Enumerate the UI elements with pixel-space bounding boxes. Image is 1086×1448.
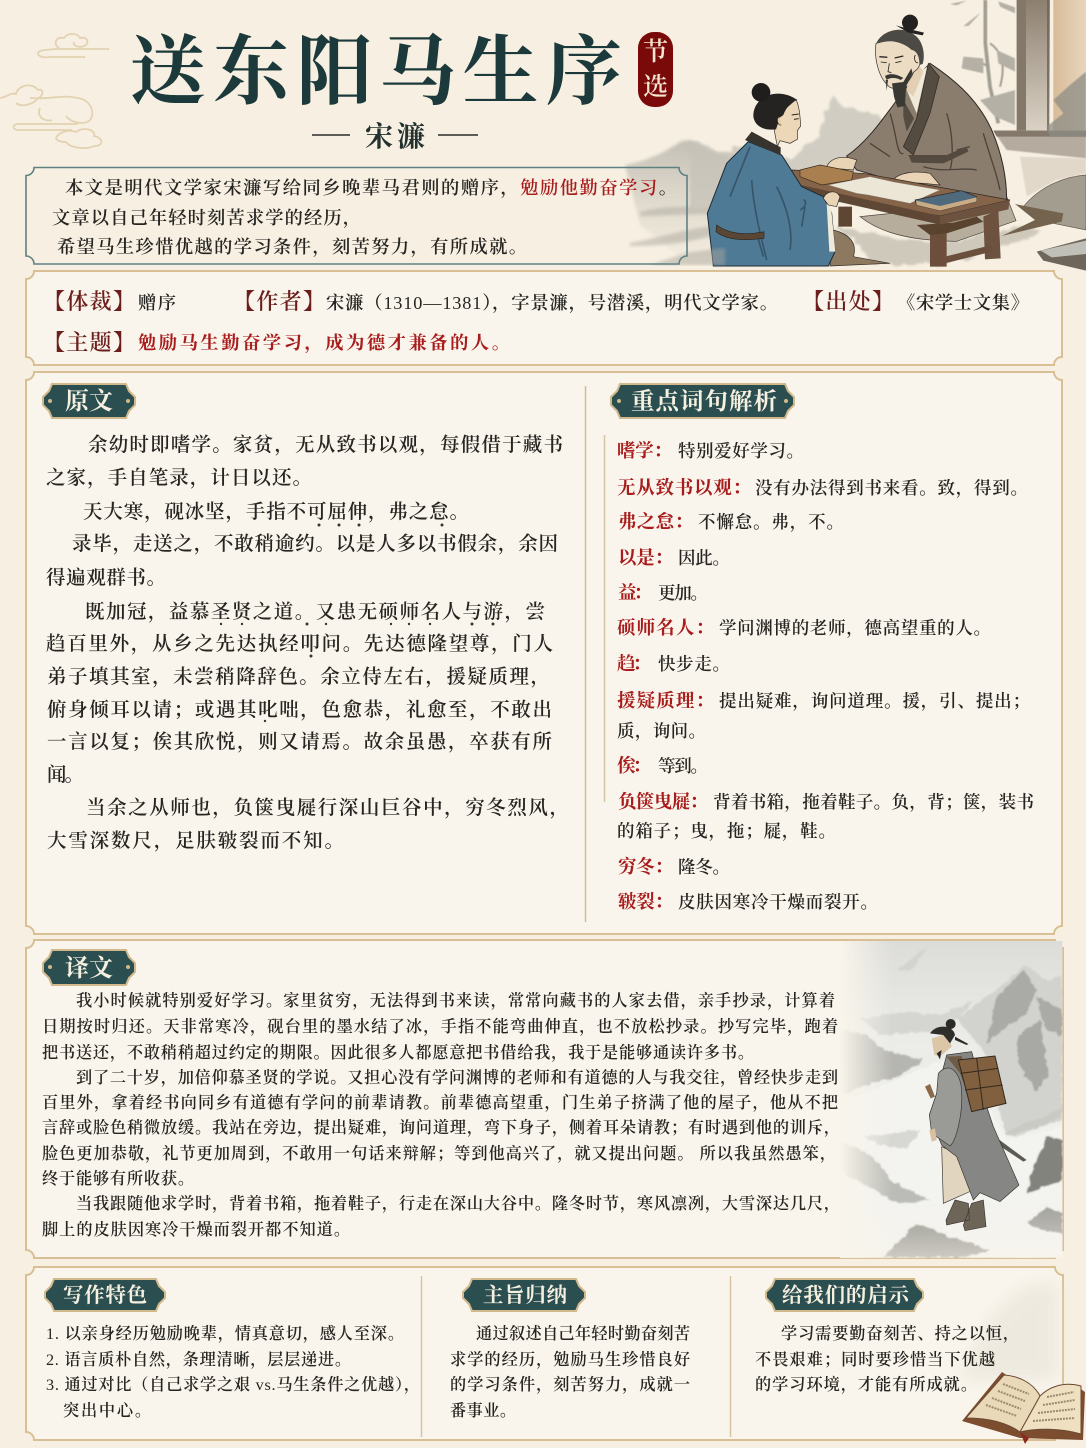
panel: basic info: [26, 271, 1062, 365]
text block: translation: 我小时候就特别爱好学习。家里贫穷，无法得到书来读，常常向藏书的人家去借，亲手抄录，计算着: [76, 991, 835, 1010]
list: vocabulary: 以是：: [618, 548, 673, 569]
column: main idea: 通过叙述自己年轻时勤奋刻苦: [476, 1324, 690, 1343]
text block: original: 一言以复；俟其欣悦，则又请焉。故余虽愚，卒获有所: [47, 731, 552, 753]
text block: original: 得遍观群书。: [46, 567, 166, 589]
background distance: [690, 97, 1043, 265]
list: vocabulary: 益：: [618, 583, 652, 604]
column: main idea: 番事业。: [450, 1401, 516, 1420]
list: vocabulary: 援疑质理：: [617, 690, 714, 712]
text block: original: 既加冠，益慕圣贤之道。又患无硕师名人与游，尝: [85, 601, 545, 623]
column: writing features: 1. 以亲身经历勉励晚辈，情真意切，感人至深。: [46, 1324, 404, 1343]
ink mountains: [625, 140, 800, 265]
figure: [993, 1137, 1027, 1162]
panel: basic info: 【体裁】: [43, 289, 135, 314]
column: takeaways: 给我们的启示: [782, 1278, 910, 1308]
icon: open book: [962, 1372, 1085, 1444]
list: vocabulary: 等到。: [658, 756, 708, 776]
seal: excerpt mark: 选: [643, 67, 668, 103]
list: vocabulary: 皮肤因寒冷干燥而裂开。: [678, 892, 878, 912]
panel: basic info: 【出处】: [802, 289, 894, 314]
text block: translation: 终于能够有所收获。: [42, 1169, 194, 1188]
panel: summary row: [26, 1267, 1063, 1440]
teacher lower robe: [860, 197, 1016, 241]
column: writing features: 2. 语言质朴自然，条理清晰，层层递进。: [46, 1350, 351, 1369]
column: writing features: 突出中心。: [63, 1402, 151, 1420]
column: takeaways: 的学习环境，才能有所成就。: [755, 1375, 977, 1394]
text block: original: 俯身倾耳以请；或遇其叱咄，色愈恭，礼愈至，不敢出: [47, 699, 552, 721]
text block: translation: 言辞或脸色稍微放缓。我站在旁边，提出疑难，询问道理，弯下身子，侧着耳朵请教；有时遇到他的训斥，: [42, 1118, 840, 1137]
column: main idea: 的学习条件，刻苦努力，成就一: [450, 1375, 690, 1394]
list: vocabulary: 没有办法得到书来看。致，得到。: [755, 478, 1028, 499]
panel: basic info: 宋濂（1310—1381），字景濂，号潜溪，明代文学家。: [326, 293, 778, 314]
column: writing features: 写作特色: [63, 1278, 147, 1308]
list: vocabulary: 嗜学：: [617, 441, 672, 462]
column: writing features: [45, 1278, 420, 1420]
teacher robe: [847, 63, 1007, 200]
text block: translation: 百里外，拿着经书向同乡有道德有学问的前辈请教。前辈德高望重，门生弟子挤满了他的屋子，他从不把: [42, 1093, 838, 1112]
list: vocabulary: 负箧曳屣：: [618, 791, 708, 813]
list: vocabulary: 质，询问。: [617, 721, 706, 742]
list: vocabulary: 学问渊博的老师，德高望重的人。: [719, 618, 991, 639]
illustration: traveller in the snow: [840, 941, 1062, 1258]
list: vocabulary: 提出疑难，询问道理。援，引、提出；: [719, 691, 1030, 712]
list: vocabulary: 无从致书以观：: [617, 478, 751, 499]
list: vocabulary: 硕师名人：: [617, 618, 714, 639]
list: vocabulary: 弗之怠：: [618, 512, 693, 533]
teacher hands: [826, 157, 857, 170]
text block: original: 天大寒，砚冰坚，手指不可屈伸，弗之怠。: [83, 500, 469, 523]
panel: basic info: 【主题】: [43, 330, 135, 355]
student head: [773, 99, 801, 147]
list: vocabulary: 趋：: [617, 654, 651, 675]
list: vocabulary: 因此。: [678, 548, 730, 568]
text block: original: 趋百里外，从乡之先达执经叩问。先达德隆望尊，门人: [46, 632, 553, 655]
table: [838, 207, 852, 227]
heading: vocabulary: 重点词句解析: [631, 382, 777, 416]
column: takeaways: 不畏艰难；同时要珍惜当下优越: [755, 1350, 995, 1369]
panel: intro: 希望马生珍惜优越的学习条件，刻苦努力，有所成就。: [57, 237, 527, 258]
panel: basic info: 《宋学士文集》: [897, 293, 1029, 313]
panel: intro: 本文是明代文学家宋濂写给同乡晚辈马君则的赠序，勉励他勤奋学习。: [65, 177, 677, 199]
title: 送东阳马生序: [130, 11, 622, 120]
heading: original text: [43, 381, 135, 418]
panel: basic info: 【作者】: [233, 289, 325, 314]
text block: original: 之家，手自笔录，计日以还。: [46, 467, 312, 489]
text block: original: 弟子填其室，未尝稍降辞色。余立侍左右，援疑质理，: [47, 665, 550, 688]
text block: translation: 日期按时归还。天非常寒冷，砚台里的墨水结了冰，手指不能弯曲伸直，也不放松抄录。抄写完毕，跑着: [42, 1017, 838, 1036]
panel: translation: [26, 940, 1063, 1258]
column: main idea: [450, 1278, 690, 1420]
column: takeaways: [755, 1278, 1019, 1394]
panel: intro: [26, 168, 687, 264]
list: vocabulary: 更加。: [658, 583, 708, 603]
list: vocabulary: 的箱子；曳，拖；屣，鞋。: [617, 821, 836, 842]
text block: original: 余幼时即嗜学。家贫，无从致书以观，每假借于藏书: [88, 434, 563, 456]
list: vocabulary: 穷冬：: [618, 856, 673, 878]
author line: 宋濂: [365, 115, 425, 155]
rock, mat, stool: [1023, 175, 1086, 230]
text block: translation: 把书送还，不敢稍稍超过约定的期限。因此很多人都愿意把书借给我，我于是能够通读许多书。: [42, 1043, 754, 1062]
column: main idea: 求学的经历，勉励马生珍惜良好: [450, 1351, 690, 1369]
student lower garment: [830, 230, 890, 266]
header illustration: teacher and student: [625, 0, 1086, 271]
text block: original: 闻。: [47, 764, 84, 786]
cloud ornaments: [0, 34, 109, 148]
panel: original text and vocabulary: [26, 372, 1062, 934]
seal: excerpt mark: [638, 32, 673, 107]
text block: translation: 当我跟随他求学时，背着书箱，拖着鞋子，行走在深山大谷中。隆冬时节，寒风凛冽，大雪深达几尺，: [76, 1194, 840, 1213]
text block: original: [46, 434, 569, 852]
list: vocabulary: [617, 441, 1034, 913]
list: vocabulary: 隆冬。: [678, 857, 730, 877]
list: vocabulary: 特别爱好学习。: [678, 441, 804, 461]
wall and window: [1053, 0, 1086, 137]
text block: original: 大雪深数尺，足肤皲裂而不知。: [47, 830, 344, 852]
bamboo: [950, 0, 1015, 125]
heading: translation: [43, 948, 135, 985]
panel: intro: 文章以自己年轻时刻苦求学的经历，: [52, 207, 361, 229]
seal: excerpt mark: 节: [643, 32, 668, 68]
teacher head: [907, 67, 923, 97]
text block: original: 当余之从师也，负箧曳屣行深山巨谷中，穷冬烈风，: [86, 797, 569, 819]
column: main idea: 主旨归纳: [483, 1278, 567, 1308]
text block: translation: [42, 991, 840, 1239]
panel: basic info: 勉励马生勤奋学习，成为德才兼备的人。: [138, 332, 510, 354]
heading: translation: 译文: [65, 948, 113, 983]
text block: translation: 脚上的皮肤因寒冷干燥而裂开都不知道。: [42, 1220, 350, 1239]
list: vocabulary: 皲裂：: [617, 891, 673, 913]
heading: original text: 原文: [65, 381, 113, 416]
column: takeaways: 学习需要勤奋刻苦、持之以恒，: [781, 1324, 1019, 1343]
panel: basic info: 赠序: [138, 293, 176, 313]
list: vocabulary: 俟：: [617, 755, 651, 777]
list: vocabulary: 背着书箱，拖着鞋子。负，背；箧，装书: [713, 792, 1034, 813]
student robe: [707, 142, 835, 266]
text block: original: 录毕，走送之，不敢稍逾约。以是人多以书假余，余因: [72, 533, 558, 555]
text block: translation: 到了二十岁，加倍仰慕圣贤的学说。又担心没有学问渊博的老师和有道德的人与我交往，曾经快步走到: [76, 1068, 838, 1087]
list: vocabulary: 不懈怠。弗，不。: [698, 512, 844, 533]
list: vocabulary: 快步走。: [658, 654, 730, 674]
column: writing features: 3. 通过对比（自己求学之艰 vs.马生条件之优越），: [46, 1375, 420, 1394]
text block: translation: 脸色更加恭敬，礼节更加周到，不敢用一句话来辩解；等到他高兴了，就又提出问题。 所以我虽然愚笨，: [42, 1144, 836, 1163]
